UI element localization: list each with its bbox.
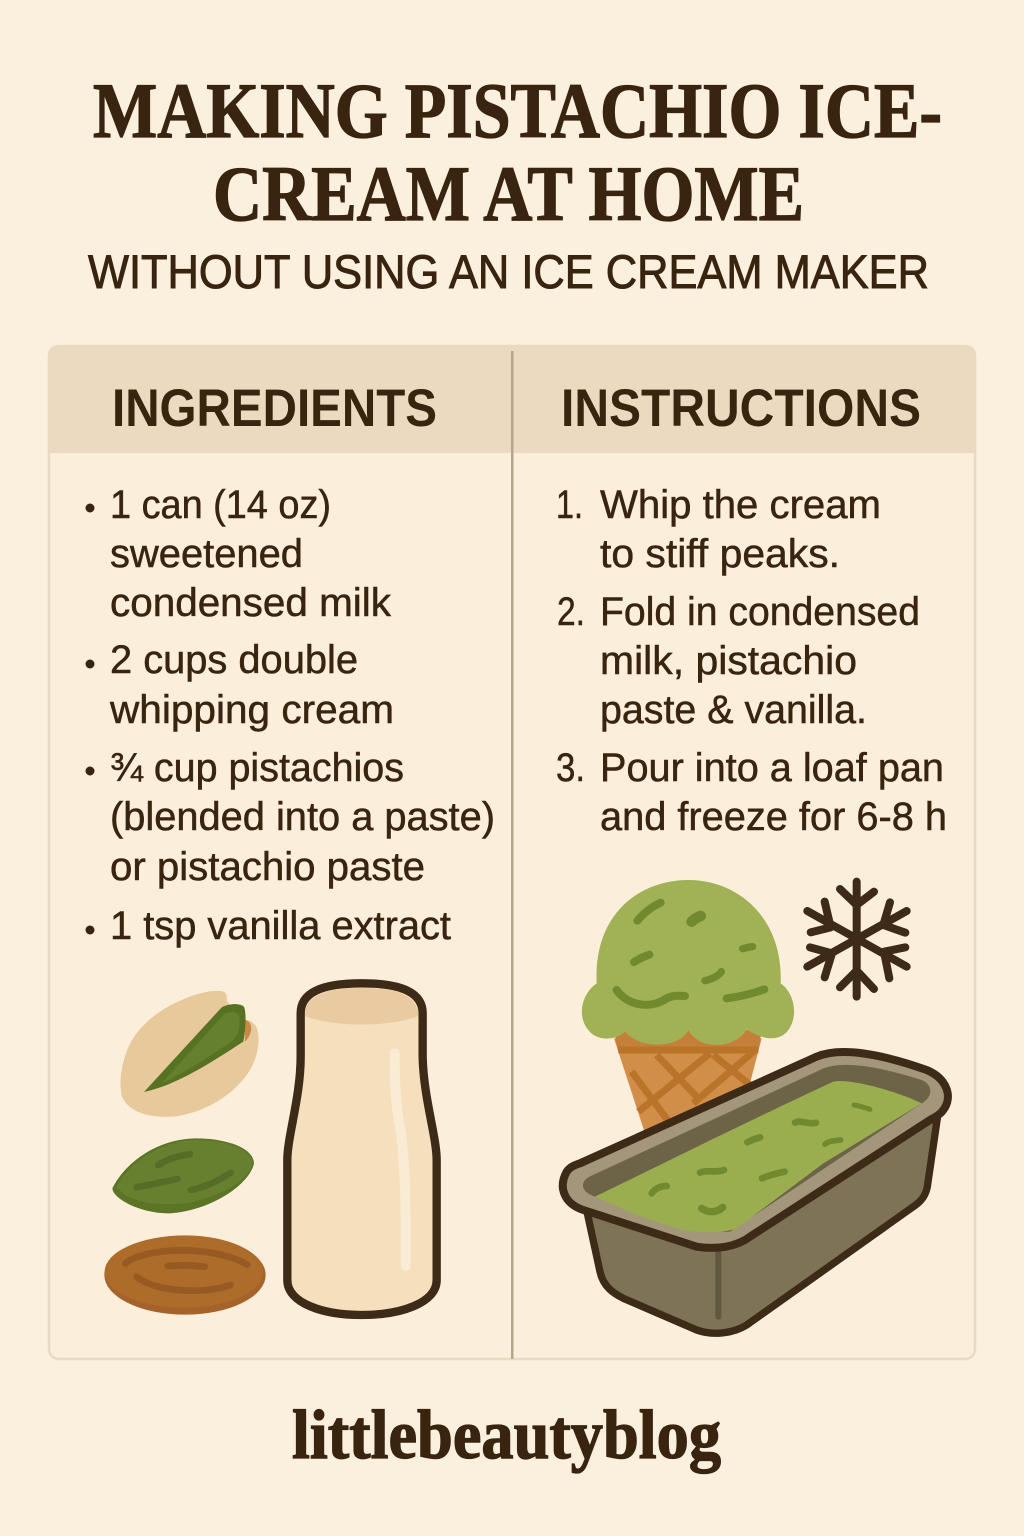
instructions list: paste & vanilla. [600,688,867,732]
instructions list: and freeze for 6-8 h [600,795,947,839]
icon: snowflake [807,882,907,997]
ingredients list: (blended into a paste) [110,795,495,839]
ingredients list: 2 cups double [110,638,358,682]
icon: milk bottle [287,983,437,1315]
instructions list: milk, pistachio [600,639,857,683]
instructions list: Pour into a loaf pan [600,746,944,790]
panel: recipe card [48,345,976,1359]
pan body [587,1118,937,1333]
ingredients list: 1 tsp vanilla extract [110,904,451,948]
instructions list: 1. [556,483,583,527]
icon: pistachio ice cream cone [582,880,794,1133]
ingredients list: whipping cream [109,688,394,732]
pan rim [563,1052,948,1248]
heading: instructions: INSTRUCTIONS [561,379,921,438]
cone [614,1030,762,1133]
ingredients list: ¾ cup pistachios [110,746,404,790]
ingredients list: or pistachio paste [110,845,425,889]
subtitle: WITHOUT USING AN ICE CREAM MAKER [88,245,929,298]
ingredients list: sweetened [110,532,303,576]
instructions list: 3. [556,746,585,790]
instructions list: 2. [557,590,585,634]
icon: open pistachio [121,991,259,1117]
icon: loaf pan with ice cream [563,1052,948,1333]
icon: shelled pistachio kernel [112,1138,254,1213]
title [93,67,942,237]
ingredients list: 1 can (14 oz) [110,483,331,527]
icon: roasted nut [104,1235,266,1315]
instructions list [556,483,947,839]
brand name: littlebeautyblog [292,1397,721,1474]
frozen pistachio mixture [595,1081,922,1232]
scoop [582,880,794,1045]
title: CREAM AT HOME [213,150,804,237]
instructions list: Fold in condensed [600,590,920,634]
instructions list: Whip the cream [600,483,881,527]
instructions list: to stiff peaks. [600,532,840,576]
heading: ingredients: INGREDIENTS [112,379,437,438]
ingredients list: condensed milk [110,581,392,625]
ingredients list [86,483,495,948]
